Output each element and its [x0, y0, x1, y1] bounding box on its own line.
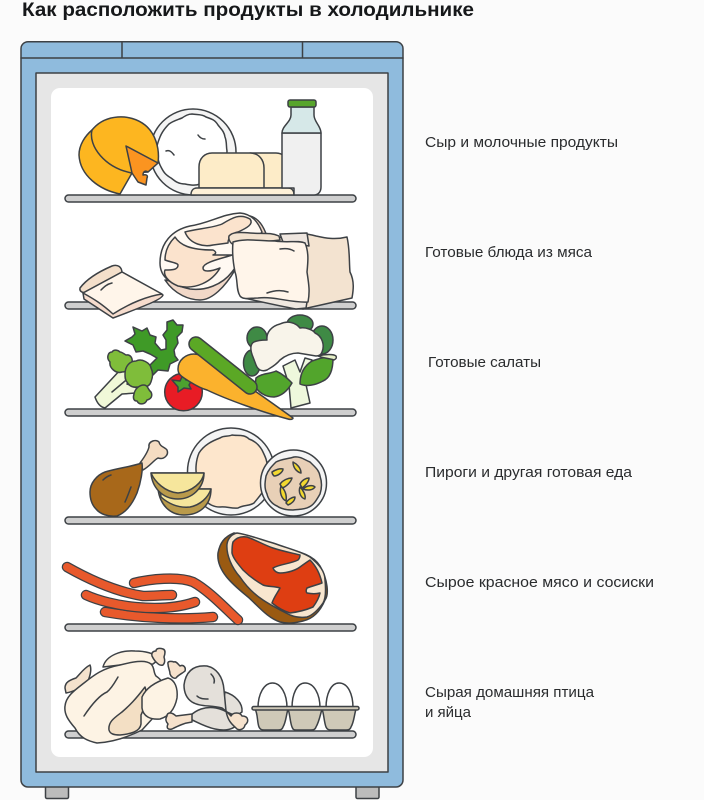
icon: broccoli — [95, 350, 153, 408]
icon: chicken leg cooked — [90, 441, 167, 516]
icon: carrot — [178, 354, 293, 419]
icon: whole chicken leg top — [103, 651, 158, 667]
shelf 4: pies and ready food — [90, 428, 326, 516]
icon: small plate with seeds — [260, 450, 326, 516]
icon: cauliflower leaves front — [255, 354, 336, 397]
icon: cheese wheel — [79, 117, 158, 194]
label: dairy: Сыр и молочные продукты — [425, 135, 618, 151]
icon: chicken wing front — [109, 687, 146, 735]
icon: plate with cheese — [150, 109, 236, 195]
icon: cauliflower leaves back — [244, 315, 333, 376]
label: salads: Готовые салаты — [428, 355, 541, 371]
shelves — [65, 195, 356, 738]
icon: raw drumstick upper — [184, 666, 226, 711]
icon: whole chicken — [65, 661, 163, 743]
icon: chicken wing back — [65, 665, 91, 693]
label: cooked meat: Готовые блюда из мяса — [425, 245, 592, 261]
icon: raw drumstick back — [222, 692, 242, 716]
icon: tomato — [165, 373, 202, 411]
label: poultry and eggs second line: и яйца — [425, 705, 471, 721]
icon: butter — [191, 153, 294, 195]
icon: meat slab — [80, 265, 163, 318]
labels — [425, 135, 654, 721]
shelf 1: dairy — [79, 100, 321, 195]
icon: milk bottle — [282, 100, 321, 195]
fridge interior — [36, 73, 388, 772]
label: pies: Пироги и другая готовая еда — [425, 465, 632, 481]
icon: chicken breast side — [142, 678, 177, 719]
icon: chicken bone two — [168, 661, 185, 678]
fridge top panel lines — [21, 42, 403, 58]
fridge — [21, 42, 403, 798]
shelf 5: raw meat and sausages — [67, 533, 327, 623]
icon: meat block back — [229, 232, 353, 309]
fridge feet — [46, 786, 379, 798]
shelf 2: cooked meat — [80, 213, 353, 318]
icon: chicken bone one — [152, 648, 165, 665]
white back wall — [51, 88, 373, 757]
icon: eggs — [258, 683, 353, 708]
icon: pie plate — [188, 428, 274, 515]
fridge body — [21, 42, 403, 787]
label: raw meat: Сырое красное мясо и сосиски — [425, 575, 654, 591]
shelf 3: salads — [95, 315, 336, 419]
icon: cucumber — [196, 344, 250, 387]
icon: egg carton — [252, 706, 359, 730]
icon: parsley — [125, 320, 183, 375]
icon: cauliflower head — [251, 322, 323, 371]
icon: potato wedges — [151, 473, 211, 515]
icon: raw steak — [218, 533, 327, 623]
label: poultry and eggs: Сырая домашняя птица — [425, 685, 594, 701]
icon: raw drumstick lower — [166, 707, 248, 730]
icon: cauliflower stem — [283, 358, 312, 408]
shelf 6: raw poultry and eggs — [65, 648, 359, 743]
icon: cooked steak — [160, 213, 268, 300]
icon: sausages — [67, 567, 238, 620]
icon: meat block front — [233, 240, 309, 302]
